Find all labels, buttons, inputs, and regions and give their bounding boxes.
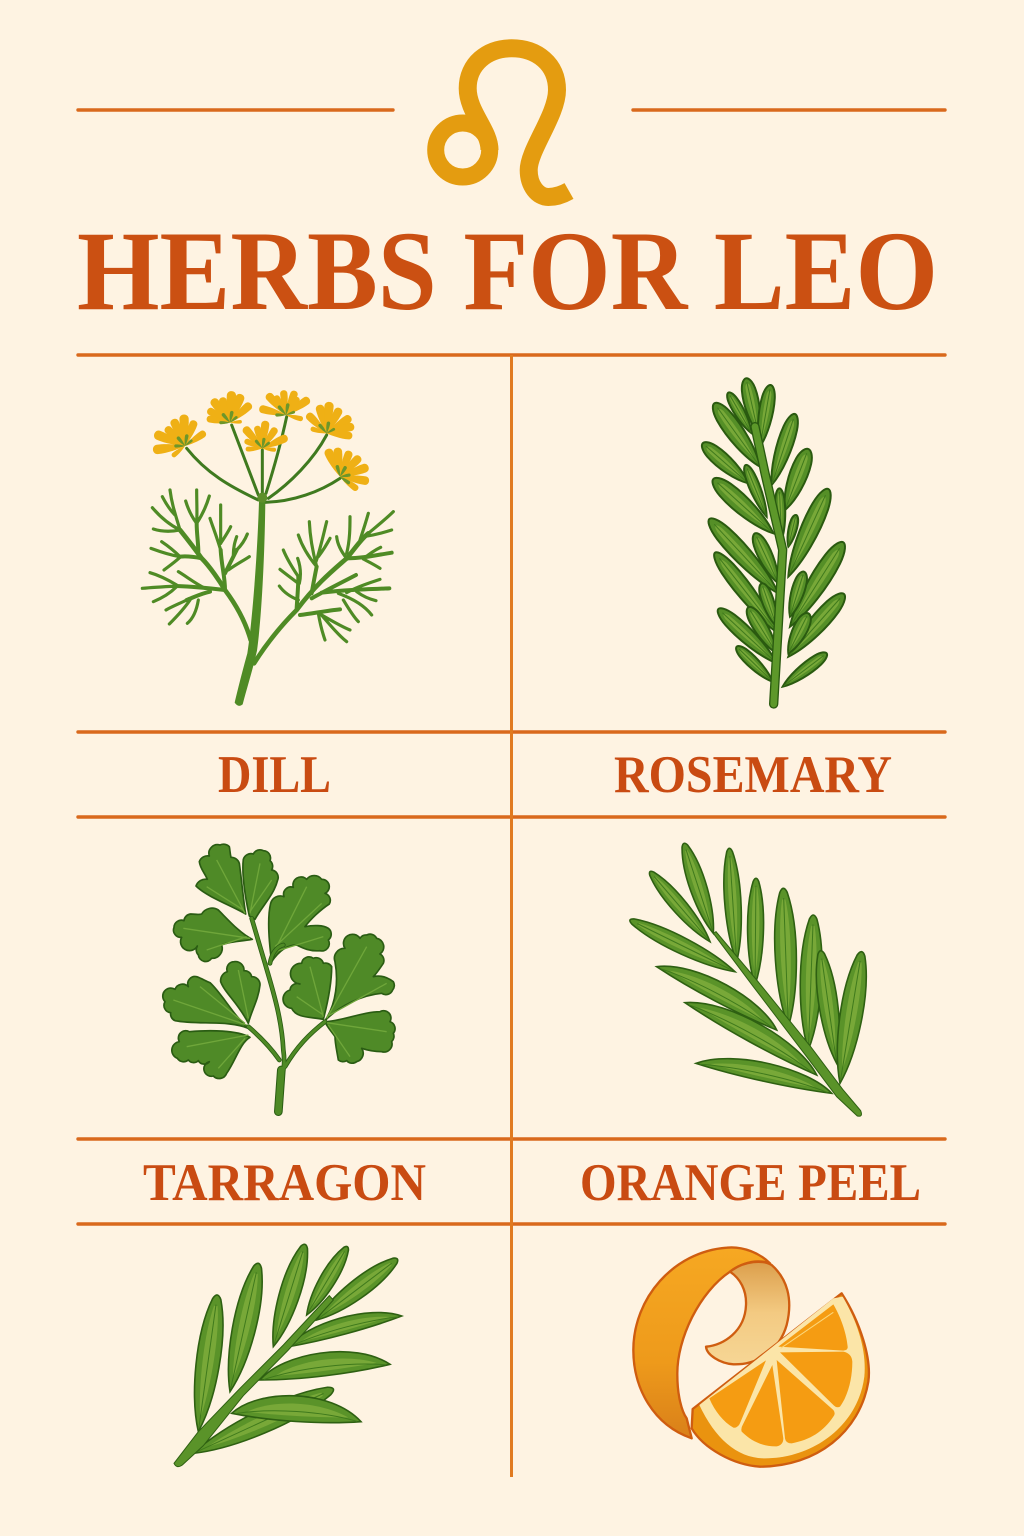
sprig stem: [713, 932, 861, 1116]
label: orange peel: ORANGE PEEL: [580, 1154, 921, 1212]
sprig leaves: [626, 841, 873, 1096]
panel: orange peel illustration: [633, 1247, 869, 1467]
panel: tarragon sprig illustration: [626, 841, 873, 1116]
orange segments: [709, 1304, 852, 1446]
grid lines: [78, 355, 945, 1477]
dill main stem: [235, 502, 265, 706]
panel: lower sprig illustration: [174, 1241, 403, 1467]
dill flower stems: [187, 417, 340, 502]
header rule: left: [78, 108, 393, 112]
segment fibres: [781, 1312, 833, 1348]
dill left frond: [142, 490, 251, 640]
peel outer band: [633, 1247, 770, 1438]
title: HERBS FOR LEO: [77, 209, 938, 334]
rosemary stem: [755, 427, 783, 704]
parsley veins: [173, 860, 387, 1068]
panel: parsley illustration, labelled tarragon: [163, 844, 395, 1112]
label: tarragon: TARRAGON: [143, 1154, 426, 1212]
header rule: right: [633, 108, 945, 112]
orange wedge pith: [699, 1297, 865, 1458]
icon: Leo zodiac glyph: [436, 48, 569, 197]
parsley leaflets: [163, 844, 395, 1079]
lower sprig leaves: [187, 1241, 403, 1464]
panel: rosemary illustration: [698, 377, 851, 704]
peel inner curl: [706, 1262, 789, 1364]
rosemary leaves: [698, 377, 851, 691]
wedge centre: [766, 1350, 777, 1361]
orange wedge rind: [692, 1293, 869, 1467]
panel: dill illustration: [142, 390, 393, 706]
lower sprig stem: [174, 1296, 333, 1467]
label: rosemary: ROSEMARY: [614, 746, 892, 804]
dill flower clusters: [152, 390, 370, 492]
dill right frond: [254, 512, 393, 663]
parsley stems: [248, 918, 325, 1112]
label: dill: DILL: [218, 746, 331, 804]
